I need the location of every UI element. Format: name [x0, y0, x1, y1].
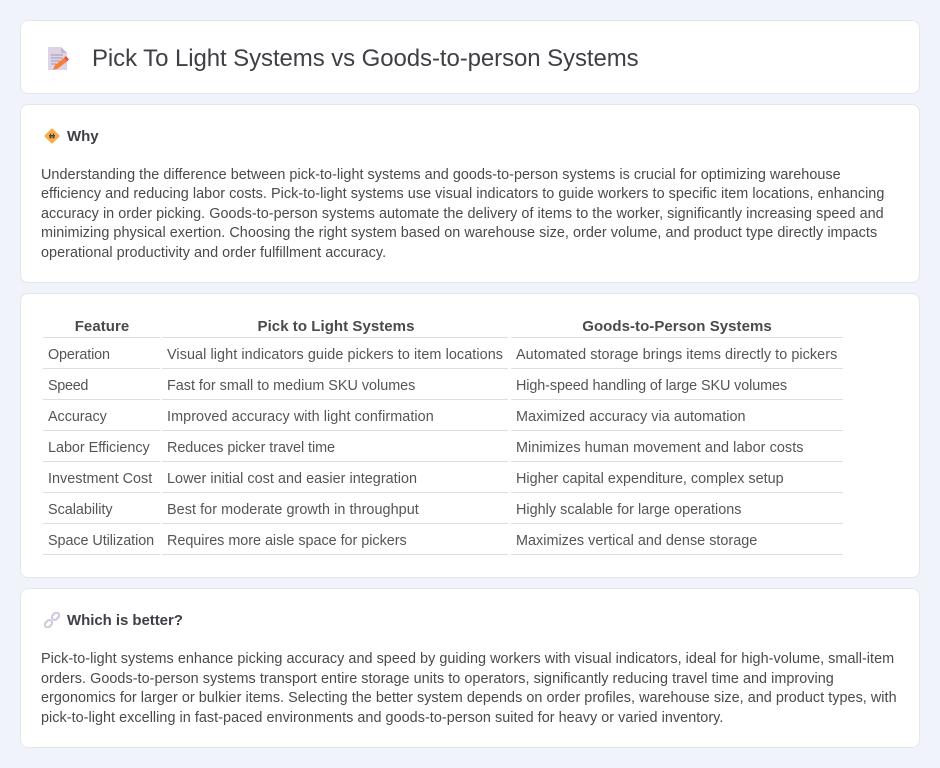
row: labor efficiency: Minimizes human movement and labor costs: [516, 440, 804, 456]
row: speed: High-speed handling of large SKU volumes: [516, 378, 787, 394]
text block: why explanation: efficiency and reducing labor costs. Pick-to-light systems use visual indicators to guide workers to specific item locations, enhancing: [41, 186, 884, 202]
text block: verdict: pick-to-light excelling in fast-paced environments and goods-to-person suited for heavy or varied inventory.: [41, 710, 723, 726]
text block: why explanation: Understanding the difference between pick-to-light systems and goods-to-person systems is crucial for optimizing warehouse: [41, 167, 841, 183]
row: accuracy: Maximized accuracy via automation: [516, 409, 746, 425]
row: accuracy: Accuracy: [48, 409, 107, 425]
panel: which is better: [20, 588, 920, 748]
row: investment cost: Lower initial cost and easier integration: [167, 471, 417, 487]
panel: comparison table: [20, 293, 920, 578]
text block: verdict: [41, 651, 897, 726]
text block: verdict: orders. Goods-to-person systems transport entire storage units to operators, significantly reducing travel time and improving: [41, 671, 834, 687]
text block: verdict: Pick-to-light systems enhance picking accuracy and speed by guiding workers with visual indicators, ideal for high-volume, small-item: [41, 651, 894, 667]
row: accuracy: Improved accuracy with light confirmation: [167, 409, 434, 425]
row: investment cost: Investment Cost: [48, 471, 152, 487]
row: scalability: Highly scalable for large operations: [516, 502, 742, 518]
text block: why explanation: [41, 167, 884, 261]
table header: [43, 318, 843, 338]
row: operation: Operation: [48, 347, 110, 363]
row: space utilization: [43, 533, 843, 555]
row: accuracy: [43, 409, 843, 431]
row: investment cost: [43, 471, 843, 493]
row: labor efficiency: [43, 440, 843, 462]
row: operation: Visual light indicators guide pickers to item locations: [167, 347, 503, 363]
table header: Feature: [75, 318, 129, 335]
heading: which is better: Which is better?: [67, 612, 183, 629]
heading: why: Why: [67, 128, 99, 145]
row: scalability: [43, 502, 843, 524]
text block: why explanation: minimizing physical exertion. Choosing the right system based on warehouse size, order volume, and product type directly impacts: [41, 225, 877, 241]
row: labor efficiency: Reduces picker travel time: [167, 440, 335, 456]
row: space utilization: Space Utilization: [48, 533, 154, 549]
text block: verdict: ergonomics for larger or bulkier items. Selecting the better system depends on order profiles, warehouse size, and product types, with: [41, 690, 897, 706]
row: investment cost: Higher capital expenditure, complex setup: [516, 471, 784, 487]
row: space utilization: Maximizes vertical and dense storage: [516, 533, 757, 549]
row: speed: Speed: [48, 378, 88, 394]
table header: Pick to Light Systems: [258, 318, 414, 335]
row: operation: Automated storage brings items directly to pickers: [516, 347, 837, 363]
row: scalability: Scalability: [48, 502, 113, 518]
icon: link: [44, 612, 60, 628]
row: labor efficiency: Labor Efficiency: [48, 440, 150, 456]
panel: title header: [20, 20, 920, 94]
panel: why: [20, 104, 920, 283]
title: Pick To Light Systems vs Goods-to-person Systems: [92, 45, 639, 72]
text block: why explanation: operational productivity and order fulfillment accuracy.: [41, 245, 386, 261]
icon: warning diamond: [44, 128, 60, 144]
table header: Goods-to-Person Systems: [582, 318, 772, 335]
row: speed: [43, 378, 843, 400]
row: scalability: Best for moderate growth in throughput: [167, 502, 419, 518]
text block: why explanation: accuracy in order picking. Goods-to-person systems automate the delivery of items to the worker, significantly increasing speed and: [41, 206, 884, 222]
row: speed: Fast for small to medium SKU volumes: [167, 378, 415, 394]
icon: memo with pencil: [48, 47, 69, 70]
row: space utilization: Requires more aisle space for pickers: [167, 533, 407, 549]
row: operation: [43, 347, 843, 369]
